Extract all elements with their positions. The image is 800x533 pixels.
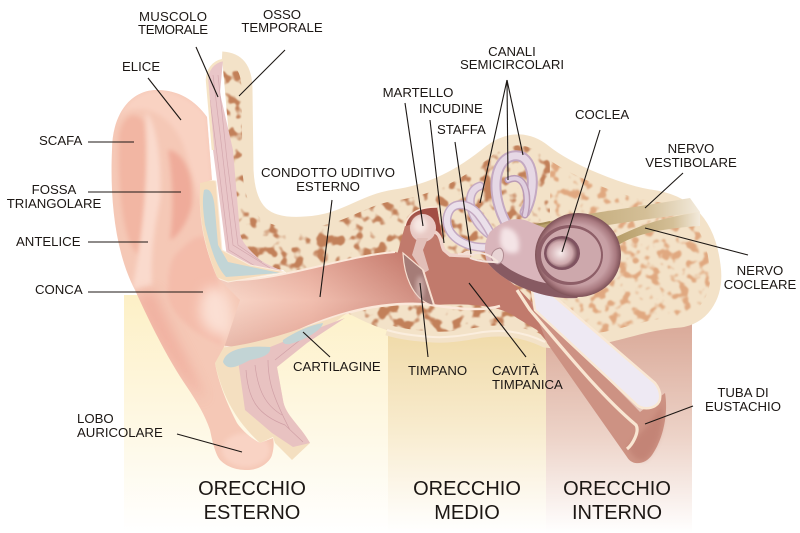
scafa [119, 115, 147, 255]
panel: orecchio medio background [388, 320, 546, 533]
label: martello: MARTELLO [383, 85, 453, 100]
label: lobo auricolare: AURICOLARE [77, 425, 163, 440]
semicircular canals [447, 156, 532, 247]
label: canali semicircolari [460, 44, 564, 203]
conca [169, 238, 219, 342]
label: antelice: ANTELICE [16, 234, 81, 249]
panel: orecchio interno background [546, 320, 692, 533]
label: nervo vestibolare: VESTIBOLARE [645, 155, 737, 170]
heading: orecchio medio: MEDIO [434, 502, 500, 524]
heading: orecchio interno [563, 478, 671, 524]
rim shading [137, 290, 200, 390]
label: osso temporale: OSSO [263, 7, 301, 22]
label: condotto uditivo esterno: CONDOTTO UDITIVO [261, 165, 395, 180]
label: scafa [39, 133, 134, 148]
label: tuba di eustachio: TUBA DI [717, 385, 769, 400]
label: nervo cocleare [645, 228, 796, 292]
heading: orecchio medio [413, 478, 521, 524]
eustachian tube cartilage [532, 290, 660, 408]
label: tuba di eustachio: EUSTACHIO [705, 399, 781, 414]
label: nervo cocleare: COCLEARE [724, 277, 796, 292]
label: timpano: TIMPANO [408, 363, 467, 378]
label: cavita timpanica: CAVITÀ [492, 363, 539, 378]
vestibule and cochlea [485, 213, 621, 298]
label: coclea: COCLEA [575, 107, 629, 122]
label: muscolo temorale: TEMORALE [138, 22, 208, 37]
fossa triangolare [168, 150, 192, 240]
label: cartilagine [293, 332, 381, 374]
upper cartilage [199, 180, 285, 282]
label: timpano [408, 283, 467, 378]
lower cartilage and muscle [215, 313, 347, 460]
muscolo temporale [207, 60, 283, 271]
label: staffa: STAFFA [437, 122, 486, 137]
label: canali semicircolari: SEMICIRCOLARI [460, 57, 564, 72]
heading: orecchio esterno: ESTERNO [204, 502, 300, 524]
label: fossa triangolare [7, 182, 181, 211]
oval window bulge [492, 248, 504, 264]
label: fossa triangolare: TRIANGOLARE [7, 196, 101, 211]
temporal bone [205, 50, 720, 350]
label: cavita timpanica: TIMPANICA [492, 377, 563, 392]
label: conca: CONCA [35, 282, 83, 297]
timpano [403, 253, 434, 305]
label: scafa: SCAFA [39, 133, 82, 148]
label: muscolo temorale: MUSCOLO [139, 9, 207, 24]
heading: orecchio interno: INTERNO [572, 502, 662, 524]
label: incudine [419, 101, 483, 243]
label: osso temporale: TEMPORALE [241, 20, 323, 35]
label: elice [122, 59, 181, 120]
label: osso temporale [239, 7, 323, 96]
external auditory canal [217, 252, 500, 348]
panel: orecchio esterno background [124, 295, 388, 533]
label: incudine: INCUDINE [419, 101, 483, 116]
label: tuba di eustachio [645, 385, 781, 424]
label: martello [383, 85, 453, 226]
antelice [132, 112, 160, 290]
tube muscle [530, 300, 666, 463]
heading: orecchio esterno [198, 478, 306, 524]
cochlea [535, 213, 621, 297]
label: lobo auricolare [77, 411, 242, 452]
heading: orecchio interno: ORECCHIO [563, 478, 671, 500]
label: coclea [562, 107, 629, 252]
lobo [222, 433, 270, 467]
heading: orecchio esterno: ORECCHIO [198, 478, 306, 500]
outer ear (auricle) [112, 90, 274, 470]
label: elice: ELICE [122, 59, 160, 74]
label: cartilagine: CARTILAGINE [293, 359, 381, 374]
label: nervo vestibolare [645, 141, 737, 208]
label: nervo cocleare: NERVO [737, 263, 783, 278]
label: lobo auricolare: LOBO [77, 411, 114, 426]
label: nervo vestibolare: NERVO [668, 141, 714, 156]
label: fossa triangolare: FOSSA [32, 182, 77, 197]
label: condotto uditivo esterno [261, 165, 395, 297]
ossicles: martello, incudine, staffa [403, 214, 498, 305]
middle ear cavity and eustachian tube [390, 207, 666, 463]
label: condotto uditivo esterno: ESTERNO [296, 179, 360, 194]
vestibular and cochlear nerves [505, 198, 700, 248]
label: muscolo temorale [138, 9, 218, 97]
heading: orecchio medio: ORECCHIO [413, 478, 521, 500]
label: antelice [16, 234, 148, 249]
label: cavita timpanica [469, 283, 563, 392]
label: canali semicircolari: CANALI [488, 44, 536, 59]
label: staffa [437, 122, 486, 254]
